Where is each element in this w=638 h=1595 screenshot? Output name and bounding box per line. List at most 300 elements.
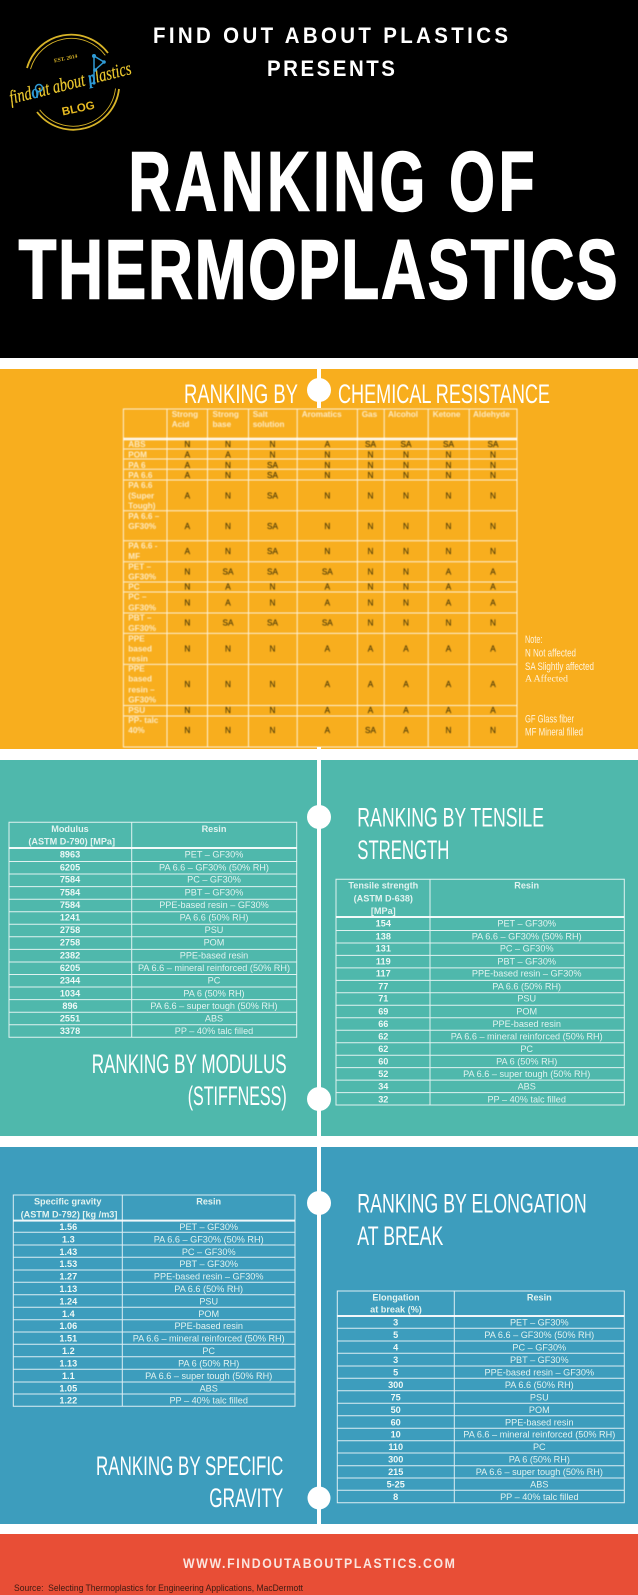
- table values: N: [368, 598, 374, 607]
- table: tensile strength: 77: [378, 981, 388, 991]
- table values: SA: [267, 461, 278, 470]
- table values: N: [368, 547, 374, 556]
- table: elongation at break: 300: [388, 1455, 403, 1465]
- table: elongation at break: 4: [393, 1343, 399, 1353]
- table values: SA: [401, 440, 412, 449]
- table: tensile strength: (ASTM D-638): [354, 893, 413, 903]
- table: specific gravity: Specific gravity: [34, 1197, 102, 1207]
- row labels: GF30%: [128, 522, 157, 531]
- table: specific gravity: 1.1: [62, 1371, 75, 1381]
- table values: N: [403, 547, 409, 556]
- table: modulus: PA 6.6 (50% RH): [180, 912, 248, 922]
- heading: ranking by specific gravity: GRAVITY: [209, 1483, 284, 1513]
- table: elongation at break: PSU: [530, 1392, 549, 1402]
- row labels: resin: [128, 654, 148, 663]
- table values: SA: [443, 440, 454, 449]
- table values: A: [185, 461, 191, 470]
- table values: N: [270, 706, 276, 715]
- table: specific gravity: 1.24: [59, 1296, 78, 1306]
- table: modulus: 2758: [60, 938, 80, 948]
- table values: A: [368, 680, 374, 689]
- table: elongation at break: 75: [391, 1392, 401, 1402]
- table values: A: [325, 583, 331, 592]
- table: elongation at break: 5: [393, 1330, 398, 1340]
- table values: A: [403, 644, 409, 653]
- heading: ranking by specific gravity: [96, 1451, 284, 1513]
- table values: A: [325, 706, 331, 715]
- table values: N: [270, 598, 276, 607]
- table: specific gravity: 1.43: [59, 1247, 77, 1257]
- table: modulus: 3378: [60, 1026, 80, 1036]
- table: tensile strength: 69: [378, 1006, 388, 1016]
- table values: SA: [365, 440, 376, 449]
- table values: N: [184, 680, 190, 689]
- table: tensile strength: 119: [376, 956, 391, 966]
- table values: N: [368, 451, 374, 460]
- table: tensile strength: 62: [378, 1032, 388, 1042]
- table values: A: [185, 522, 191, 531]
- table values: N: [270, 644, 276, 653]
- table: tensile strength: PPE-based resin – GF30%: [472, 969, 581, 979]
- table values: A: [185, 547, 191, 556]
- table values: N: [403, 491, 409, 500]
- table: specific gravity: PSU: [199, 1296, 218, 1306]
- table values: N: [446, 619, 452, 628]
- table: tensile strength: 34: [378, 1082, 389, 1092]
- table values: N: [490, 471, 496, 480]
- table: elongation at break: 5: [393, 1368, 398, 1378]
- presenter heading: [153, 23, 508, 81]
- table values: N: [368, 522, 374, 531]
- table values: N: [324, 471, 330, 480]
- table: elongation at break: PC – GF30%: [512, 1343, 566, 1353]
- table header row: Salt: [253, 410, 268, 419]
- table values: N: [446, 471, 452, 480]
- row labels: GF30%: [128, 573, 157, 582]
- table: specific gravity: PC – GF30%: [182, 1247, 236, 1257]
- table: modulus: PA 6.6 – mineral reinforced (50% RH): [138, 963, 290, 973]
- table values: A: [490, 680, 496, 689]
- table values: SA: [267, 619, 278, 628]
- row labels: MF: [128, 552, 140, 561]
- row labels: (Super: [128, 492, 155, 501]
- panel: chemical resistance: [0, 369, 638, 749]
- table: modulus: PBT – GF30%: [185, 887, 243, 897]
- table: elongation at break: PP – 40% talc filled: [500, 1492, 579, 1502]
- table: modulus: 1034: [60, 988, 81, 998]
- legend note: GF Glass fiber: [525, 714, 574, 726]
- table: tensile strength: Tensile strength: [348, 881, 419, 891]
- row labels: PA 6.6: [128, 481, 153, 490]
- title: RANKING OF: [128, 135, 534, 229]
- heading: ranking by elongation at break: AT BREAK: [357, 1221, 444, 1251]
- table: elongation at break: PET – GF30%: [510, 1318, 569, 1328]
- table values: A: [325, 644, 331, 653]
- table: tensile strength: [336, 879, 624, 1105]
- table values: N: [225, 680, 231, 689]
- table: elongation at break: PA 6 (50% RH): [509, 1455, 570, 1465]
- table: modulus: PPE-based resin – GF30%: [159, 900, 269, 910]
- table: elongation at break: Resin: [527, 1292, 552, 1302]
- table values: A: [490, 706, 496, 715]
- table: tensile strength: 62: [378, 1044, 388, 1054]
- table header row: Aldehyde: [473, 410, 510, 419]
- table values: N: [403, 461, 409, 470]
- table: elongation at break: Elongation: [372, 1292, 420, 1302]
- table: tensile strength: PPE-based resin: [492, 1019, 561, 1029]
- table values: N: [184, 598, 190, 607]
- table: specific gravity: Resin: [196, 1197, 222, 1207]
- table: elongation at break: 3: [393, 1355, 398, 1365]
- table values: N: [403, 583, 409, 592]
- table values: N: [225, 644, 231, 653]
- table: tensile strength: [MPa]: [371, 906, 396, 916]
- table: tensile strength: PA 6.6 (50% RH): [492, 981, 561, 991]
- table: tensile strength: POM: [516, 1006, 537, 1016]
- table values: N: [368, 471, 374, 480]
- heading: ranking by modulus: (STIFFNESS): [188, 1081, 287, 1111]
- table values: N: [324, 451, 330, 460]
- table values: N: [225, 522, 231, 531]
- table values: A: [325, 726, 331, 735]
- table values: SA: [267, 568, 278, 577]
- table: modulus: 1241: [60, 912, 80, 922]
- table: chemical resistance: [123, 409, 517, 747]
- table values: A: [185, 471, 191, 480]
- table: elongation at break: PA 6.6 (50% RH): [505, 1380, 574, 1390]
- table: modulus: ABS: [205, 1013, 223, 1023]
- table: elongation at break: PC: [533, 1442, 546, 1452]
- table values: SA: [223, 568, 234, 577]
- panel: modulus and tensile strength: [0, 760, 638, 1136]
- table values: N: [184, 726, 190, 735]
- table: tensile strength: PA 6.6 – mineral reinforced (50% RH): [451, 1032, 603, 1042]
- table: modulus: PA 6.6 – super tough (50% RH): [150, 1001, 278, 1011]
- table values: N: [184, 706, 190, 715]
- table: modulus: PA 6 (50% RH): [183, 988, 245, 998]
- row labels: GF30%: [128, 695, 157, 704]
- table: tensile strength: 52: [378, 1069, 388, 1079]
- table values: N: [225, 471, 231, 480]
- table: tensile strength: PA 6 (50% RH): [496, 1057, 557, 1067]
- table: tensile strength: PSU: [517, 994, 536, 1004]
- table values: A: [225, 583, 231, 592]
- table: modulus: 2344: [60, 976, 81, 986]
- heading: ranking by chemical resistance: [184, 379, 550, 409]
- row labels: PA 6: [128, 461, 146, 470]
- table values: N: [225, 547, 231, 556]
- table: elongation at break: 60: [391, 1417, 401, 1427]
- table values: N: [225, 461, 231, 470]
- table: specific gravity: PET – GF30%: [179, 1222, 238, 1232]
- panel: specific gravity and elongation: [0, 1147, 638, 1524]
- table: elongation at break: PBT – GF30%: [510, 1355, 569, 1365]
- table: modulus: 7584: [60, 900, 81, 910]
- table: elongation at break: 3: [393, 1318, 398, 1328]
- table values: N: [368, 583, 374, 592]
- table: modulus: 6205: [60, 862, 80, 872]
- row labels: PPE: [128, 634, 145, 643]
- row labels: based: [128, 644, 152, 653]
- table values: A: [225, 598, 231, 607]
- table: specific gravity: 1.13: [59, 1284, 77, 1294]
- icon: find out about plastics blog logo: BLOG: [61, 100, 96, 118]
- table: elongation at break: PPE-based resin: [505, 1417, 574, 1427]
- row labels: [128, 440, 160, 735]
- title: THERMOPLASTICS: [18, 222, 618, 316]
- table: modulus: PA 6.6 – GF30% (50% RH): [159, 862, 269, 872]
- table values: N: [490, 461, 496, 470]
- table values: N: [270, 440, 276, 449]
- table header row: Ketone: [433, 410, 461, 419]
- table header row: Aromatics: [302, 410, 342, 419]
- table values: A: [403, 726, 409, 735]
- table: modulus: PC – GF30%: [187, 875, 241, 885]
- table values: SA: [267, 547, 278, 556]
- table: tensile strength: PET – GF30%: [497, 919, 556, 929]
- icon: find out about plastics blog logo: findout about plastics: [7, 58, 133, 109]
- table: tensile strength: PP – 40% talc filled: [487, 1094, 566, 1104]
- table values: N: [446, 547, 452, 556]
- presenter heading: FIND OUT ABOUT PLASTICS: [153, 23, 508, 48]
- legend note: N Not affected: [525, 648, 576, 660]
- table values: A: [446, 568, 452, 577]
- table values: N: [490, 726, 496, 735]
- heading: ranking by tensile strength: RANKING BY TENSILE: [357, 803, 544, 833]
- table: tensile strength: 154: [376, 919, 392, 929]
- table: modulus: PET – GF30%: [185, 850, 243, 860]
- title: [18, 135, 618, 316]
- table values: N: [324, 547, 330, 556]
- table values: N: [403, 619, 409, 628]
- table values: A: [490, 583, 496, 592]
- table values: N: [403, 451, 409, 460]
- table values: A: [325, 680, 331, 689]
- table: modulus: POM: [204, 938, 224, 948]
- table: modulus: PP – 40% talc filled: [175, 1026, 253, 1036]
- table: specific gravity: 1.05: [59, 1383, 77, 1393]
- table values: A: [446, 598, 452, 607]
- table: modulus: Modulus: [51, 824, 89, 834]
- table: tensile strength: 60: [378, 1057, 388, 1067]
- table values: A: [225, 451, 231, 460]
- table values: A: [185, 491, 191, 500]
- table: tensile strength: Resin: [514, 881, 540, 891]
- table: elongation at break: [337, 1291, 624, 1503]
- table: specific gravity: 1.56: [59, 1222, 77, 1232]
- table values: N: [368, 619, 374, 628]
- table values: N: [225, 491, 231, 500]
- table values: A: [490, 568, 496, 577]
- table values: N: [324, 491, 330, 500]
- table values: N: [324, 461, 330, 470]
- table values: N: [270, 583, 276, 592]
- presenter heading: PRESENTS: [267, 56, 395, 81]
- legend note: MF Mineral filled: [525, 727, 583, 739]
- timeline divider with circles: [307, 358, 331, 1524]
- table values: N: [368, 568, 374, 577]
- heading: ranking by tensile strength: STRENGTH: [357, 835, 449, 865]
- table: tensile strength: ABS: [518, 1082, 536, 1092]
- row labels: GF30%: [128, 624, 157, 633]
- table: modulus: 7584: [60, 875, 81, 885]
- table values: A: [325, 440, 331, 449]
- row labels: GF30%: [128, 603, 157, 612]
- table: elongation at break: PA 6.6 – GF30% (50% RH): [484, 1330, 594, 1340]
- panel: black title header: [0, 0, 638, 358]
- table: tensile strength: PA 6.6 – super tough (50% RH): [463, 1069, 590, 1079]
- table: tensile strength: PBT – GF30%: [497, 956, 556, 966]
- table values: N: [184, 568, 190, 577]
- panel: red footer: [0, 1534, 638, 1595]
- table values: N: [403, 471, 409, 480]
- table: elongation at break: PPE-based resin – GF30%: [485, 1368, 594, 1378]
- table: tensile strength: 117: [376, 969, 391, 979]
- table values: A: [490, 644, 496, 653]
- row labels: PBT –: [128, 613, 152, 622]
- website address: WWW.FINDOUTABOUTPLASTICS.COM: [183, 1555, 455, 1571]
- table values: A: [325, 598, 331, 607]
- table: modulus: 7584: [60, 887, 81, 897]
- table: specific gravity: PP – 40% talc filled: [169, 1396, 248, 1406]
- table values: A: [446, 583, 452, 592]
- table values: A: [403, 706, 409, 715]
- table values: A: [446, 644, 452, 653]
- table values: SA: [365, 726, 376, 735]
- legend note: A Affected: [525, 674, 568, 685]
- table values: SA: [267, 491, 278, 500]
- row labels: resin –: [128, 685, 155, 694]
- table: elongation at break: 110: [388, 1442, 403, 1452]
- table: specific gravity: 1.51: [59, 1334, 77, 1344]
- table: specific gravity: PA 6.6 – super tough (50% RH): [145, 1371, 272, 1381]
- legend note: SA Slightly affected: [525, 661, 594, 673]
- table values: A: [368, 644, 374, 653]
- table: modulus: Resin: [202, 824, 227, 834]
- row labels: PC: [128, 583, 140, 592]
- table: specific gravity: 1.13: [59, 1358, 77, 1368]
- table values: N: [270, 726, 276, 735]
- table: modulus: 2382: [60, 950, 80, 960]
- table values: N: [270, 451, 276, 460]
- table: specific gravity: [13, 1195, 295, 1406]
- heading: ranking by modulus: [92, 1049, 287, 1111]
- table: elongation at break: POM: [529, 1405, 550, 1415]
- table values: N: [368, 461, 374, 470]
- table values: N: [490, 547, 496, 556]
- row labels: PET –: [128, 563, 151, 572]
- table header row: solution: [253, 420, 285, 429]
- table: specific gravity: 1.3: [62, 1234, 75, 1244]
- table: specific gravity: ABS: [200, 1383, 218, 1393]
- table header row: base: [212, 420, 232, 429]
- table: specific gravity: 1.06: [59, 1321, 77, 1331]
- table: modulus: 2551: [60, 1013, 80, 1023]
- table values: SA: [322, 619, 333, 628]
- table: elongation at break: 5-25: [387, 1479, 405, 1489]
- table values: N: [225, 726, 231, 735]
- table: tensile strength: PC: [520, 1044, 533, 1054]
- table values: A: [446, 680, 452, 689]
- table: elongation at break: PA 6.6 – super tough (50% RH): [476, 1467, 603, 1477]
- table header row: Alcohol: [388, 410, 418, 419]
- table values: A: [403, 680, 409, 689]
- icon: find out about plastics blog logo: EST. 2014: [54, 54, 78, 64]
- table values: N: [184, 644, 190, 653]
- table: specific gravity: PPE-based resin: [174, 1321, 243, 1331]
- table values: A: [368, 706, 374, 715]
- table: modulus: PSU: [205, 925, 223, 935]
- legend note: Note:: [525, 634, 542, 646]
- heading: ranking by elongation at break: [357, 1189, 587, 1251]
- heading: ranking by chemical resistance: RANKING BY: [184, 379, 298, 409]
- table: tensile strength: 32: [378, 1094, 388, 1104]
- row labels: PA 6.6: [128, 471, 153, 480]
- icon: find out about plastics blog logo: [7, 35, 133, 130]
- table values: N: [446, 461, 452, 470]
- table values: N: [490, 451, 496, 460]
- table: elongation at break: PA 6.6 – mineral reinforced (50% RH): [463, 1430, 615, 1440]
- table values: SA: [488, 440, 499, 449]
- table: modulus: PPE-based resin: [180, 950, 248, 960]
- table: tensile strength: 66: [378, 1019, 388, 1029]
- table: specific gravity: PC: [202, 1346, 215, 1356]
- table: specific gravity: 1.53: [59, 1259, 77, 1269]
- row labels: PA 6.6 -: [128, 542, 158, 551]
- table header row: Strong: [172, 410, 198, 419]
- table: specific gravity: (ASTM D-792) [kg /m3]: [21, 1209, 117, 1219]
- table values: N: [490, 491, 496, 500]
- table: tensile strength: PC – GF30%: [500, 944, 554, 954]
- table values: N: [446, 522, 452, 531]
- row labels: PSU: [128, 706, 145, 715]
- row labels: PP- talc: [128, 716, 159, 725]
- table: specific gravity: PA 6.6 – GF30% (50% RH): [154, 1234, 264, 1244]
- table: tensile strength: PA 6.6 – GF30% (50% RH): [472, 931, 582, 941]
- table: elongation at break: 50: [391, 1405, 401, 1415]
- table: elongation at break: ABS: [530, 1479, 548, 1489]
- table values: N: [490, 522, 496, 531]
- table values: N: [184, 440, 190, 449]
- row labels: PPE: [128, 664, 145, 673]
- table: specific gravity: PPE-based resin – GF30%: [154, 1272, 263, 1282]
- table values: N: [403, 598, 409, 607]
- source citation: Source: Selecting Thermoplastics for Engineering Applications, MacDermott: [14, 1583, 303, 1594]
- table: specific gravity: PA 6.6 (50% RH): [174, 1284, 243, 1294]
- row labels: PA 6.6 –: [128, 512, 160, 521]
- table values: SA: [267, 522, 278, 531]
- table: tensile strength: 138: [376, 931, 391, 941]
- table values: SA: [223, 619, 234, 628]
- table: modulus: 6205: [60, 963, 80, 973]
- table values: N: [225, 440, 231, 449]
- table values: A: [446, 706, 452, 715]
- table: elongation at break: 215: [388, 1467, 403, 1477]
- row labels: POM: [128, 451, 147, 460]
- table: specific gravity: PA 6 (50% RH): [178, 1358, 239, 1368]
- table: tensile strength: 71: [378, 994, 388, 1004]
- row labels: 40%: [128, 726, 145, 735]
- table header row: [172, 410, 510, 429]
- legend note: [525, 634, 594, 739]
- table values: N: [446, 451, 452, 460]
- table: specific gravity: 1.27: [59, 1272, 77, 1282]
- table: specific gravity: 1.22: [59, 1396, 77, 1406]
- row labels: Tough): [128, 502, 156, 511]
- table values: N: [403, 568, 409, 577]
- table values: N: [490, 619, 496, 628]
- table values: N: [324, 522, 330, 531]
